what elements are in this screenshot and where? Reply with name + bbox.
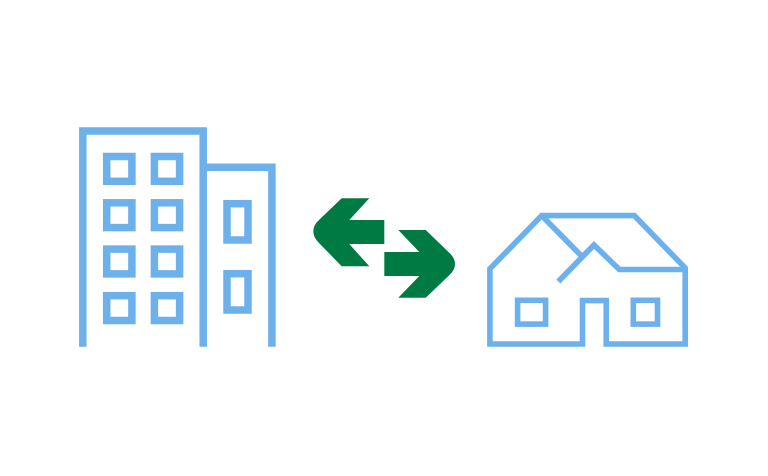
tower windows	[107, 156, 180, 320]
icon: exchange arrows	[313, 198, 455, 298]
tall tower outline	[83, 131, 203, 347]
house outline with door	[490, 216, 685, 344]
annex outline	[203, 167, 272, 347]
icon: house	[490, 216, 685, 344]
icon: apartment building	[83, 131, 272, 347]
right arrow	[384, 230, 455, 298]
annex windows	[227, 204, 248, 310]
front gable line	[558, 245, 685, 282]
right window	[633, 300, 658, 324]
inner roof line	[542, 216, 581, 256]
left arrow	[313, 198, 384, 266]
left window	[518, 300, 546, 324]
